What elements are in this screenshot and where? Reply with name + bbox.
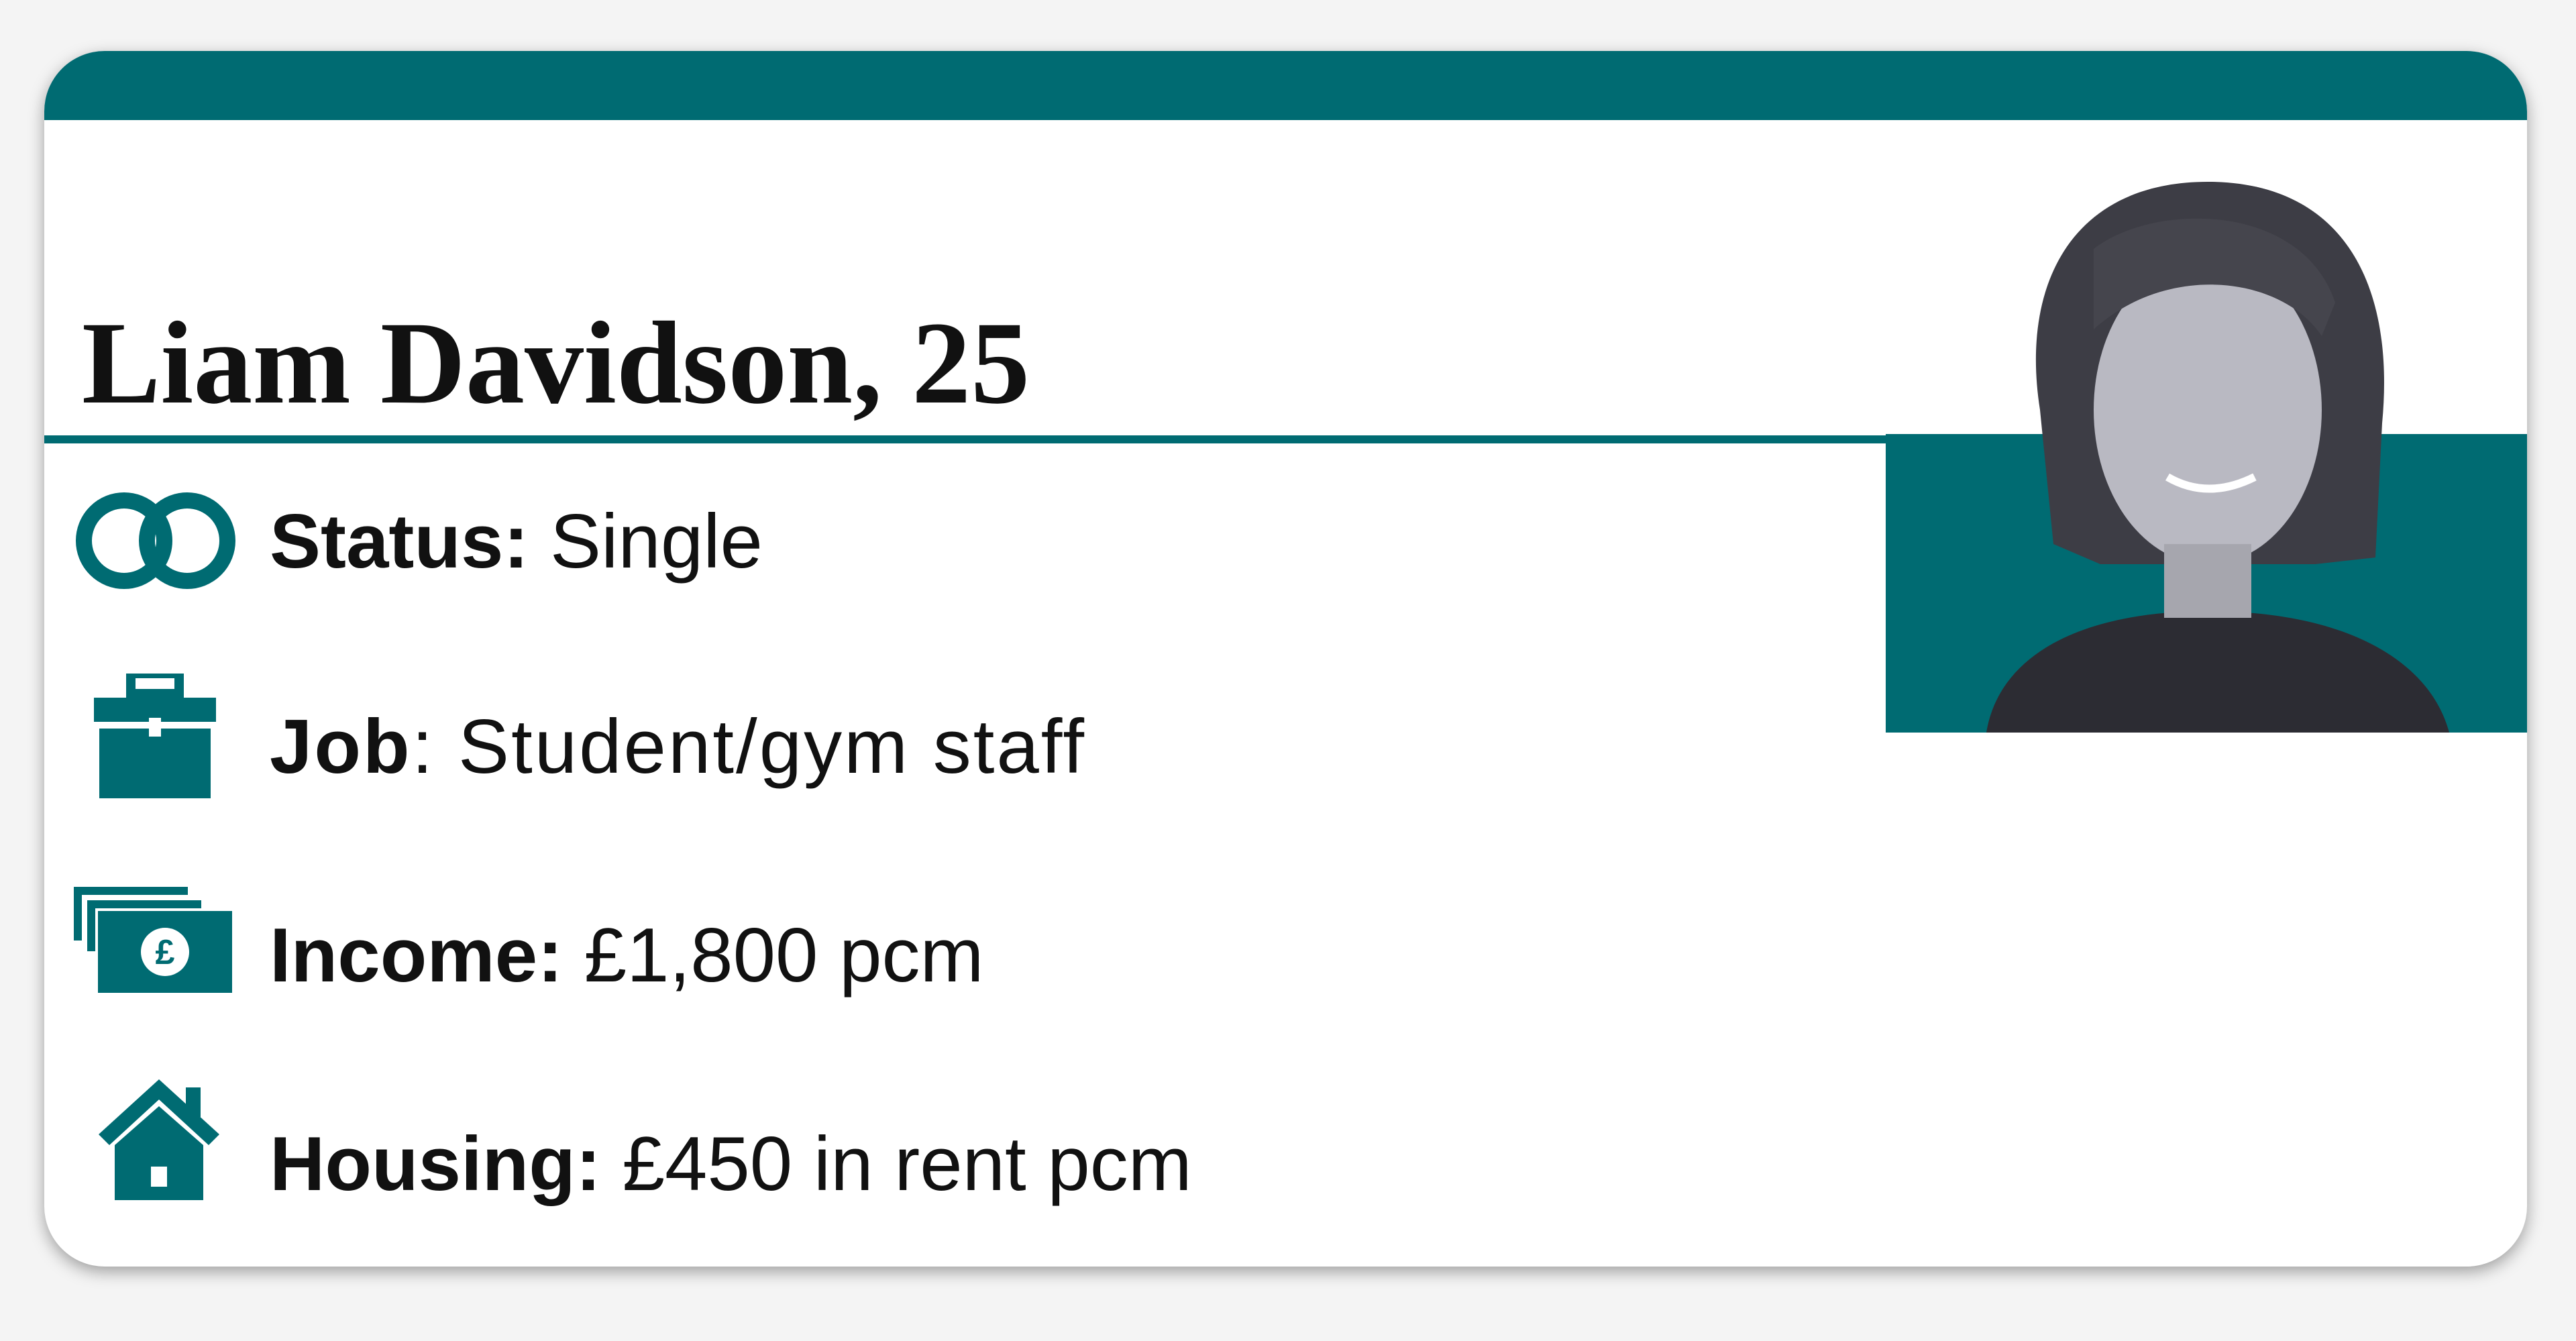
teal underline <box>44 435 1886 443</box>
housing text: Housing: £450 in rent pcm <box>270 1122 1192 1207</box>
title: Liam Davidson, 25 <box>82 298 1030 429</box>
icon: briefcase <box>94 674 216 798</box>
income text: Income: £1,800 pcm <box>270 913 983 998</box>
icon: rings <box>76 492 235 589</box>
top teal bar <box>44 51 2527 120</box>
icon: banknotes <box>74 887 232 993</box>
icon: house <box>99 1079 219 1200</box>
icon: banknotes: £ <box>156 933 175 972</box>
photo panel <box>1886 182 2527 733</box>
job text: Job: Student/gym staff <box>270 704 1086 790</box>
status text: Status: Single <box>270 499 763 584</box>
